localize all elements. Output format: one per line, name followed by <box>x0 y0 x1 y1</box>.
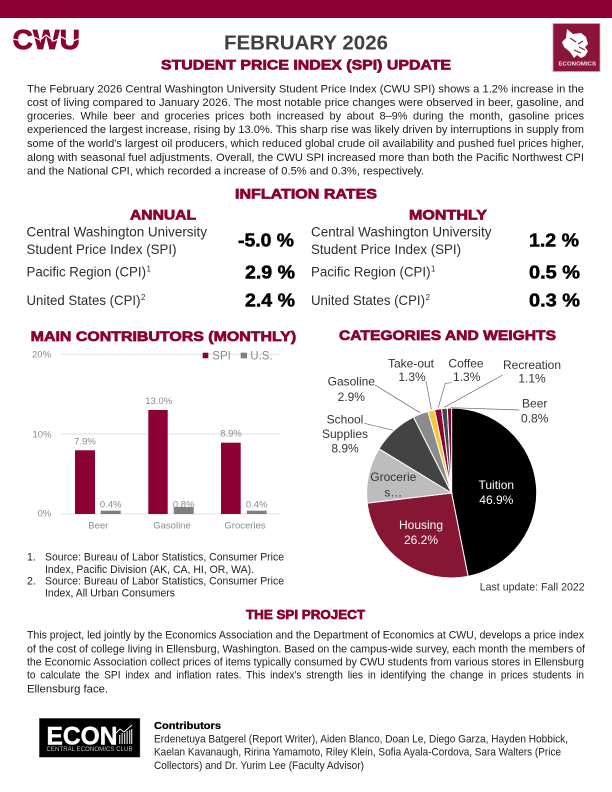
CWU logo: CWU <box>12 24 80 55</box>
intro paragraph: groceries. While beer and groceries prices both increased by about 8–9% during the month, gasoline prices <box>27 110 584 122</box>
legend: SPI <box>212 350 231 362</box>
slice labels: 46.9% <box>479 493 514 507</box>
row: Pacific monthly <box>311 263 580 283</box>
slice labels: 2.9% <box>338 390 365 404</box>
slice labels: 8.9% <box>331 442 359 456</box>
contributors: Collectors) and Dr. Yurim Lee (Faculty Advisor) <box>154 760 364 772</box>
row: US monthly <box>311 291 580 311</box>
ECON club logo: CENTRAL ECONOMICS CLUB <box>46 747 132 753</box>
row: SPI annual: Central Washington University <box>26 224 207 240</box>
intro paragraph: and the National CPI, which recorded a increase of 0.5% and 0.3%, respectively. <box>27 166 424 178</box>
footnotes: Source: Bureau of Labor Statistics, Consumer Price <box>45 576 284 588</box>
row: SPI monthly: Student Price Index (SPI) <box>311 241 461 257</box>
row: SPI monthly: 1.2 % <box>529 231 579 251</box>
pie chart: categories and weights <box>322 357 561 578</box>
row: Pacific annual: Pacific Region (CPI) <box>26 264 146 280</box>
row: Pacific annual: 1 <box>146 265 152 274</box>
project paragraph: the Economic Association collect prices of items typically consumed by CWU students from various stores in Ellensburg <box>27 657 584 669</box>
slice labels: s… <box>384 486 402 500</box>
bars: beer <box>74 437 122 531</box>
panel: annual inflation <box>26 206 295 311</box>
bars: gasoline: Gasoline <box>153 520 191 531</box>
slice labels: Gasoline <box>328 375 375 389</box>
bars: groceries: 8.9% <box>220 429 242 440</box>
bars: beer: Beer <box>88 520 108 531</box>
footnotes: Index, Pacific Division (AK, CA, HI, OR, WA). <box>45 564 254 576</box>
slice labels: Take-out <box>388 357 435 371</box>
slice labels: School <box>327 413 363 427</box>
icon: rising bars <box>119 729 132 744</box>
intro paragraph <box>27 83 584 178</box>
row: SPI monthly <box>311 224 579 257</box>
row: US monthly: 2 <box>426 293 430 302</box>
slice labels: 1.3% <box>453 370 481 384</box>
heading: the SPI project: THE SPI PROJECT <box>246 607 365 622</box>
ECON club logo <box>39 718 140 757</box>
heading: main contributors: MAIN CONTRIBUTORS (MONTHLY) <box>31 328 296 344</box>
economics badge <box>553 24 600 72</box>
project paragraph: of the cost of college living in Ellensburg, Washington. Based on the campus-wide survey, each month the members of <box>27 644 586 656</box>
bars: gasoline <box>145 396 195 531</box>
bars: groceries: 0.4% <box>246 499 268 510</box>
bars: groceries: Groceries <box>224 520 266 531</box>
legend <box>203 350 273 362</box>
note: last update: Last update: Fall 2022 <box>480 582 585 594</box>
legend: U.S. <box>250 350 273 362</box>
project paragraph: This project, led jointly by the Economics Association and the Department of Economics at CWU, develops a price index <box>27 630 584 642</box>
row: SPI annual: Student Price Index (SPI) <box>26 241 176 257</box>
row: US monthly: 0.3 % <box>529 291 580 311</box>
y axis labels <box>32 350 52 520</box>
contributors <box>154 721 568 772</box>
heading: categories and weights: CATEGORIES AND WEIGHTS <box>339 327 556 343</box>
footnotes: Source: Bureau of Labor Statistics, Consumer Price <box>45 551 284 563</box>
project paragraph <box>27 630 586 696</box>
row: US monthly: United States (CPI) <box>311 292 425 308</box>
row: Pacific annual: 2.9 % <box>245 263 295 283</box>
y axis labels: 0% <box>38 509 52 520</box>
row: Pacific monthly: Pacific Region (CPI) <box>311 264 430 280</box>
slice labels: Coffee <box>448 357 484 371</box>
bars: gasoline: 13.0% <box>145 396 173 407</box>
y axis labels: 20% <box>32 350 52 361</box>
footnotes: 1. <box>27 551 36 563</box>
panel: monthly inflation <box>311 206 580 311</box>
heading: annual: ANNUAL <box>130 206 196 222</box>
bar chart: main contributors <box>32 350 280 531</box>
bars: beer: 7.9% <box>74 437 96 448</box>
heading: monthly: MONTHLY <box>409 206 488 222</box>
bars: groceries <box>220 429 268 531</box>
title: month: FEBRUARY 2026 <box>224 32 388 54</box>
intro paragraph: cost of living compared to January 2026. The most notable price changes were observed in beer, gasoline, and <box>27 97 584 109</box>
leader lines <box>364 375 519 430</box>
bars: gasoline: 0.8% <box>173 499 195 510</box>
intro paragraph: some of the world's largest oil producers, which reduced global crude oil availability and pushed fuel prices higher, <box>27 138 584 150</box>
row: US annual: 2.4 % <box>245 291 295 311</box>
row: Pacific annual <box>26 263 295 283</box>
slice labels: Tuition <box>479 478 514 492</box>
contributors: Kaelan Kavanaugh, Ririna Yamamoto, Riley Klein, Sofia Ayala-Cordova, Sara Walters (Price <box>154 747 561 759</box>
project paragraph: Ellensburg face. <box>27 684 108 696</box>
intro paragraph: experienced the largest increase, rising by 13.0%. This sharp rise was likely driven by interruptions in supply from <box>27 124 584 136</box>
slice labels: Beer <box>522 397 547 411</box>
slice labels: 1.1% <box>518 372 546 386</box>
row: US annual: United States (CPI) <box>26 292 140 308</box>
slice labels: 26.2% <box>404 533 438 547</box>
row: Pacific monthly: 0.5 % <box>529 263 580 283</box>
intro paragraph: along with seasonal fuel adjustments. Overall, the CWU SPI increased more than both the Pacific Northwest CPI <box>27 152 584 164</box>
slice labels: Supplies <box>322 427 368 441</box>
footnotes <box>27 551 284 600</box>
slice labels: Recreation <box>503 358 561 372</box>
slice labels: Grocerie <box>370 470 417 484</box>
row: SPI annual: -5.0 % <box>238 231 294 251</box>
icon: wildcat <box>562 29 588 58</box>
row: US annual: 2 <box>141 293 146 302</box>
row: SPI annual <box>26 224 294 257</box>
contributors: Erdenetuya Batgerel (Report Writer), Aiden Blanco, Doan Le, Diego Garza, Hayden Hobbick, <box>154 734 568 746</box>
bars: beer: 0.4% <box>100 499 122 510</box>
slice labels: 1.3% <box>398 370 426 384</box>
y axis labels: 10% <box>32 429 52 440</box>
slice labels: 0.8% <box>521 412 549 426</box>
footnotes: Index, All Urban Consumers <box>45 588 175 600</box>
contributors: Contributors <box>154 721 221 732</box>
slice labels: Housing <box>399 518 443 532</box>
top banner <box>0 0 612 18</box>
row: Pacific monthly: 1 <box>431 265 436 274</box>
subtitle: STUDENT PRICE INDEX (SPI) UPDATE <box>161 56 451 72</box>
row: US annual <box>26 291 295 311</box>
slice labels <box>322 357 561 547</box>
slices <box>367 408 537 578</box>
intro paragraph: The February 2026 Central Washington University Student Price Index (CWU SPI) shows a 1.2% increase in the <box>27 83 584 95</box>
footnotes: 2. <box>27 576 36 588</box>
heading: inflation rates: INFLATION RATES <box>235 186 377 202</box>
row: SPI monthly: Central Washington University <box>311 224 492 240</box>
economics badge: ECONOMICS <box>558 62 596 68</box>
ECON club logo: ECON <box>46 722 118 750</box>
